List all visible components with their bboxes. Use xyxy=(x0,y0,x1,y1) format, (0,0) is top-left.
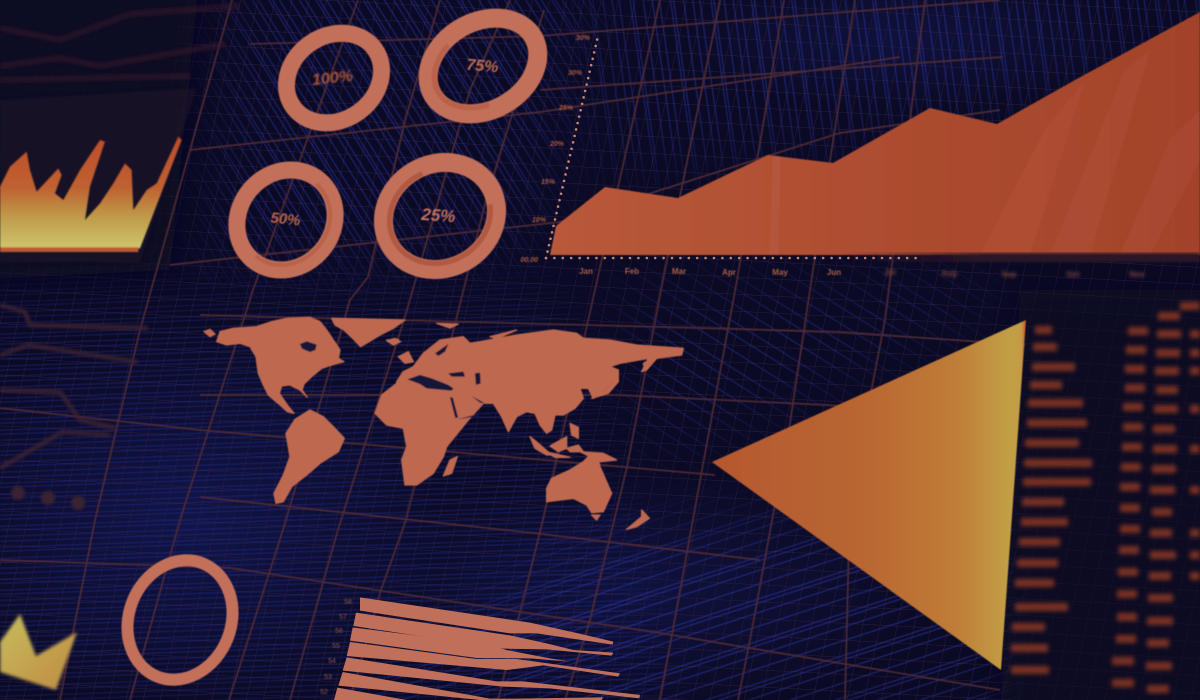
y axis labels: 30% xyxy=(576,35,591,42)
value column one xyxy=(1112,327,1148,687)
y axis labels: 20% xyxy=(549,141,565,148)
y axis labels: 30% xyxy=(568,70,583,77)
x axis labels: Jun xyxy=(827,268,841,277)
ring: 75%: 75% xyxy=(466,57,499,76)
ring: 75% xyxy=(411,0,555,133)
New Zealand xyxy=(627,510,649,529)
x axis labels: Jul xyxy=(884,268,896,277)
ring: 50%: 50% xyxy=(270,210,301,230)
inland seas xyxy=(407,344,485,419)
spiky yellow area chart xyxy=(0,137,182,252)
ring: 100% xyxy=(269,15,399,141)
left faint chart panel xyxy=(0,6,240,262)
ring: 50% xyxy=(217,150,355,290)
Alaska island and Iceland xyxy=(204,329,401,345)
y axis labels: 00.00 xyxy=(520,257,538,264)
value column two xyxy=(1146,312,1181,693)
label column xyxy=(1011,326,1092,674)
area shape xyxy=(550,12,1200,255)
left circuit lines xyxy=(0,305,148,508)
x axis labels: Sep xyxy=(1002,270,1016,279)
North America xyxy=(217,317,344,413)
bar axis labels: 52 xyxy=(320,689,328,696)
donut rings xyxy=(217,0,555,290)
ring: 100%: 100% xyxy=(311,68,354,89)
ring: 25%: 25% xyxy=(420,205,456,226)
area chart xyxy=(520,12,1200,279)
bar axis labels: 57 xyxy=(339,614,347,621)
Greenland xyxy=(332,318,405,347)
top left faded chart xyxy=(0,6,240,80)
axis blur band xyxy=(840,253,1200,262)
UK and arctic islands xyxy=(387,323,517,363)
bar axis labels xyxy=(320,599,352,696)
x axis labels: May xyxy=(772,268,788,277)
Hudson Bay xyxy=(300,341,317,352)
Australia xyxy=(547,453,612,513)
x axis labels: Jan xyxy=(579,267,593,276)
crown shaped area chart xyxy=(0,614,77,690)
x axis labels: Aug xyxy=(941,269,957,278)
bars xyxy=(334,597,640,700)
x axis labels: Nov xyxy=(1129,270,1145,279)
x axis labels: Apr xyxy=(722,268,736,277)
y axis labels: 10% xyxy=(532,217,547,224)
ring: 25% xyxy=(364,142,516,290)
axis dots xyxy=(546,36,1200,258)
bar axis labels: 58 xyxy=(344,599,352,606)
Eurasia and Africa xyxy=(375,330,683,485)
x axis labels: Oct xyxy=(1066,270,1080,279)
horizontal bar chart xyxy=(320,597,640,700)
Tasmania xyxy=(592,515,600,520)
y axis labels: 15% xyxy=(541,179,556,186)
world map xyxy=(204,317,683,529)
x axis labels: Mar xyxy=(672,267,686,276)
Americas xyxy=(204,317,405,503)
bar axis labels: 55 xyxy=(332,643,340,650)
y axis labels xyxy=(520,35,591,264)
x axis labels: Feb xyxy=(625,267,639,276)
Old world xyxy=(375,323,683,529)
large empty ring xyxy=(110,544,250,696)
y axis labels: 25% xyxy=(558,105,574,112)
x axis labels xyxy=(579,267,1145,279)
data table xyxy=(1011,302,1200,693)
bar axis labels: 56 xyxy=(335,628,343,635)
value column three xyxy=(1180,302,1200,580)
bar axis labels: 53 xyxy=(324,674,332,681)
bar axis labels: 54 xyxy=(328,658,336,665)
funnel triangle xyxy=(712,320,1026,670)
Asian archipelago xyxy=(530,358,653,462)
Madagascar xyxy=(443,457,457,476)
South America xyxy=(274,410,344,503)
